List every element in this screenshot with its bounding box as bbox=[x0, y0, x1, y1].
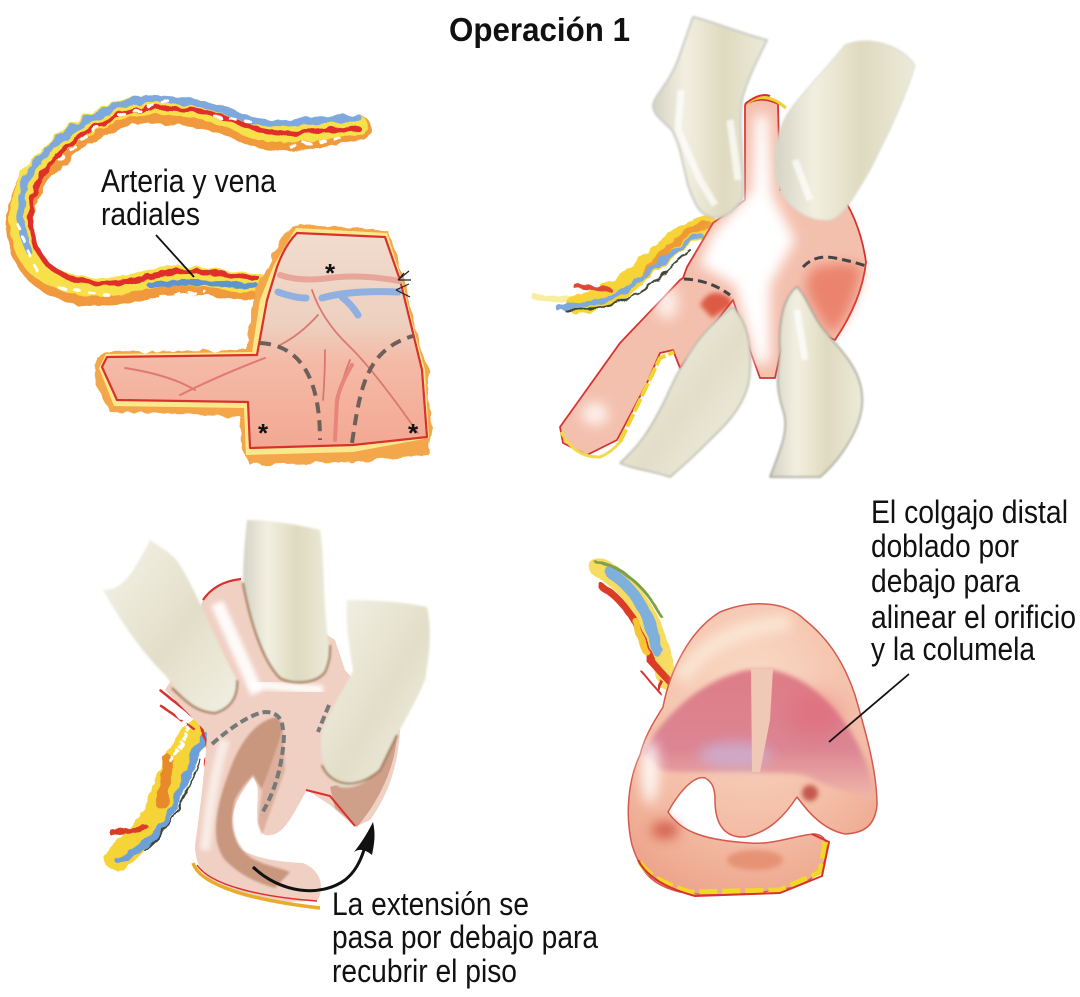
pedicle bbox=[535, 224, 708, 310]
label: el colgajo distal: doblado por bbox=[871, 528, 1019, 564]
flap bbox=[560, 95, 866, 457]
panel: radial forearm flap drawing bbox=[18, 99, 431, 465]
dashed fold lines bbox=[684, 257, 866, 295]
label: arteria y vena radiales: radiales bbox=[101, 196, 200, 232]
red and yellow edges bbox=[203, 579, 241, 600]
shaded folds bbox=[802, 785, 818, 801]
flap bbox=[165, 579, 400, 908]
asterisks: * bbox=[258, 418, 269, 448]
panel: bottom right folded flap bbox=[596, 494, 1076, 896]
label: arteria y vena radiales bbox=[101, 163, 276, 277]
pedicle bbox=[112, 690, 207, 860]
asterisks: * bbox=[408, 418, 419, 448]
label: la extension: La extensión se bbox=[332, 886, 529, 922]
dashed fold lines bbox=[212, 705, 329, 815]
label: el colgajo distal bbox=[829, 494, 1076, 742]
label: la extension bbox=[332, 886, 598, 989]
pedicle bbox=[596, 562, 668, 695]
yellow and red edge bbox=[640, 842, 825, 892]
asterisks bbox=[258, 258, 419, 448]
label: la extension: recubrir el piso bbox=[332, 953, 517, 989]
label: la extension: pasa por debajo para bbox=[332, 919, 598, 955]
arrow bbox=[253, 822, 375, 891]
folded flap body bbox=[628, 604, 877, 896]
vascular pedicle bbox=[18, 99, 358, 296]
flap vessels bbox=[125, 275, 418, 440]
fingers bbox=[620, 17, 915, 477]
central strip bbox=[751, 669, 773, 772]
label: arteria y vena radiales: Arteria y vena bbox=[101, 163, 276, 199]
label: el colgajo distal: debajo para bbox=[871, 563, 1020, 599]
title: Operación 1 bbox=[449, 11, 630, 48]
asterisks: * bbox=[325, 258, 336, 288]
sutures bbox=[396, 271, 411, 297]
label: el colgajo distal: y la columela bbox=[871, 631, 1035, 667]
panel: bottom left flap with fingers bbox=[103, 520, 598, 989]
flap body bbox=[96, 224, 431, 465]
panel: top right flap with fingers bbox=[535, 17, 915, 477]
dashed fold lines bbox=[260, 336, 413, 443]
pink dome bbox=[643, 670, 872, 800]
fingers bbox=[103, 520, 430, 788]
